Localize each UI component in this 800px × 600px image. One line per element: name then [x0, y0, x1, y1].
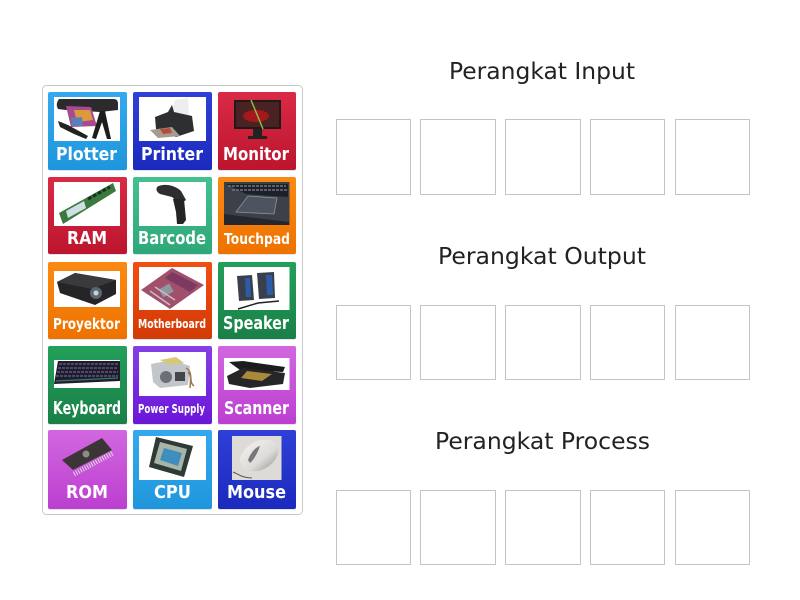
tile: Printer: Printer — [141, 144, 203, 165]
tile: Barcode: Barcode — [138, 228, 206, 249]
tile: CPU: CPU — [154, 482, 191, 503]
tile: Scanner: Scanner — [224, 398, 289, 419]
tile: Motherboard: Motherboard — [138, 317, 206, 331]
tile: Monitor — [218, 92, 296, 171]
panel: item tray — [42, 86, 302, 514]
tile: Mouse: Mouse — [227, 482, 286, 503]
heading: Perangkat Output: Perangkat Output — [438, 244, 646, 270]
tile: Plotter — [48, 92, 127, 171]
heading: Perangkat Process: Perangkat Process — [435, 429, 650, 455]
tile: ROM: ROM — [66, 482, 108, 503]
tile: Monitor: Monitor — [223, 144, 289, 165]
tile: Scanner — [218, 346, 296, 425]
drop zone row: Perangkat Input — [336, 120, 750, 194]
tile: Keyboard — [48, 346, 127, 425]
tile: RAM — [48, 177, 127, 255]
tile: Touchpad — [218, 177, 296, 255]
tile: RAM: RAM — [67, 228, 107, 249]
tile: Barcode — [133, 177, 212, 255]
tile: Keyboard: Keyboard — [53, 398, 121, 419]
drop zone row: Perangkat Process — [336, 490, 750, 564]
tile: Speaker — [218, 262, 296, 340]
tile: Speaker: Speaker — [223, 313, 289, 334]
tile: Power Supply — [133, 346, 212, 425]
tile: Printer — [133, 92, 212, 171]
tile: CPU — [133, 430, 212, 510]
tile: ROM — [48, 430, 127, 510]
tile: Mouse — [218, 430, 296, 510]
heading: Perangkat Input: Perangkat Input — [449, 59, 635, 85]
tile: Power Supply: Power Supply — [138, 402, 205, 416]
tile: Proyektor — [48, 262, 127, 340]
drop zone row: Perangkat Output — [336, 306, 750, 380]
tile: Motherboard — [133, 262, 212, 340]
tile: Proyektor: Proyektor — [53, 315, 120, 333]
tile: Plotter: Plotter — [56, 144, 117, 165]
tile: Touchpad: Touchpad — [224, 230, 290, 248]
